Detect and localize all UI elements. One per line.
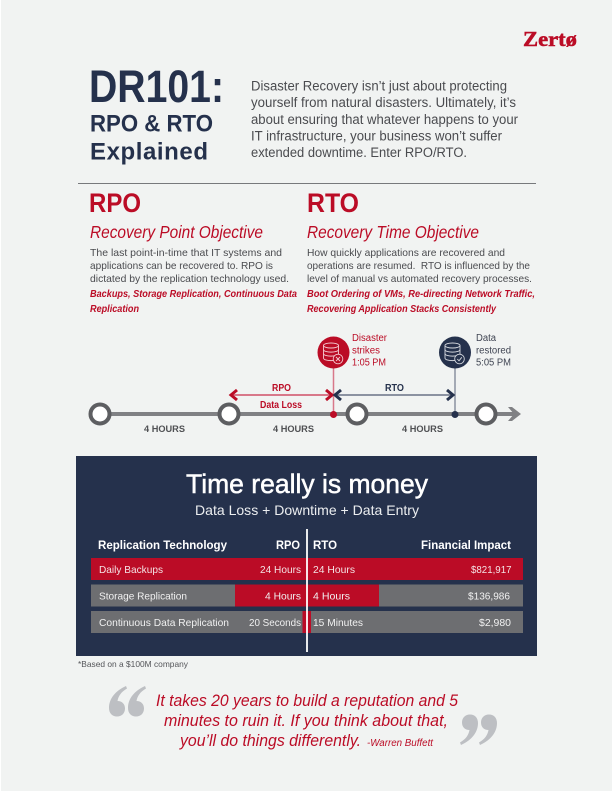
disaster stem xyxy=(330,365,337,418)
RTO examples: Boot Ordering of VMs, Re-directing Network Traffic, xyxy=(307,288,535,300)
RPO examples: Replication xyxy=(90,303,139,315)
logo: Zerto: Zertø xyxy=(523,27,577,51)
RTO description xyxy=(307,247,532,285)
RTO description: operations are resumed. RTO is influenced by the xyxy=(307,260,530,272)
intro paragraph: Disaster Recovery isn’t just about protecting xyxy=(251,78,507,94)
icon: database failure xyxy=(318,336,350,368)
RTO heading: RTO xyxy=(307,188,359,218)
RPO arrow: Data Loss xyxy=(260,400,302,411)
RTO examples xyxy=(307,288,535,315)
RTO examples: Recovering Application Stacks Consistently xyxy=(307,303,497,315)
restored label: restored xyxy=(476,346,511,356)
RTO arrow xyxy=(335,383,453,400)
panel subheading: Data Loss + Downtime + Data Entry xyxy=(195,502,419,518)
restored label xyxy=(476,333,511,368)
table header: Replication Technology xyxy=(98,538,227,552)
RTO subtitle: Recovery Time Objective xyxy=(307,222,479,242)
row: daily backups xyxy=(91,558,523,580)
intro paragraph xyxy=(251,78,518,160)
duration labels: 4 HOURS xyxy=(144,424,185,435)
restored stem xyxy=(452,365,458,418)
RPO description: The last point-in-time that IT systems and xyxy=(90,247,282,259)
quote text: -Warren Buffett xyxy=(367,738,434,749)
table header xyxy=(98,538,511,552)
quote xyxy=(109,686,497,750)
RPO description: dictated by the replication technology used. xyxy=(90,273,289,285)
row: continuous data replication xyxy=(91,611,523,633)
footnote: *Based on a $100M company xyxy=(78,659,189,669)
table header: RPO xyxy=(276,538,300,552)
quote text: It takes 20 years to build a reputation and 5 xyxy=(156,691,459,710)
disaster label: Disaster xyxy=(352,333,388,344)
duration labels: 4 HOURS xyxy=(402,424,443,435)
intro paragraph: yourself from natural disasters. Ultimately, it’s xyxy=(251,95,516,110)
table header: RTO xyxy=(313,538,337,552)
quote text: minutes to ruin it. If you think about that, xyxy=(164,711,448,730)
RPO description: applications can be recovered to. RPO is xyxy=(90,260,273,272)
row: storage replication: Storage Replication xyxy=(99,590,187,602)
row: storage replication: 4 Hours xyxy=(265,590,301,602)
row: continuous data replication: 20 Seconds xyxy=(249,617,301,629)
icon: closing quotation mark xyxy=(460,714,497,745)
title: Explained xyxy=(90,138,208,166)
panel: RPO definition xyxy=(89,188,297,315)
timeline axis with arrow xyxy=(100,407,521,421)
icon: opening quotation mark xyxy=(109,686,146,716)
duration labels: 4 HOURS xyxy=(273,424,314,435)
duration labels xyxy=(144,424,443,435)
title: RPO & RTO xyxy=(90,110,213,138)
RPO arrow xyxy=(231,383,332,411)
intro paragraph: extended downtime. Enter RPO/RTO. xyxy=(251,145,467,160)
row: daily backups: $821,917 xyxy=(471,564,512,576)
timeline nodes xyxy=(90,404,496,424)
RPO arrow: RPO xyxy=(272,383,291,394)
title: DR101: xyxy=(89,61,224,112)
row: continuous data replication: $2,980 xyxy=(479,617,511,629)
title xyxy=(89,61,224,166)
row: storage replication xyxy=(91,584,523,606)
RPO heading: RPO xyxy=(89,188,141,218)
RPO examples xyxy=(90,288,297,315)
RTO arrow: RTO xyxy=(385,383,404,394)
disaster label: 1:05 PM xyxy=(352,358,386,368)
RPO examples: Backups, Storage Replication, Continuous Data xyxy=(90,288,297,300)
RPO subtitle: Recovery Point Objective xyxy=(90,222,263,242)
intro paragraph: IT infrastructure, your business won’t suffer xyxy=(251,128,502,144)
row: continuous data replication: 15 Minutes xyxy=(313,617,363,629)
timeline chart xyxy=(90,333,521,435)
restored label: 5:05 PM xyxy=(476,358,511,368)
disaster label xyxy=(352,333,388,368)
panel: time really is money xyxy=(76,456,537,656)
row: daily backups: 24 Hours xyxy=(260,564,301,576)
panel heading: Time really is money xyxy=(186,469,428,499)
row: daily backups: Daily Backups xyxy=(99,564,163,576)
row: continuous data replication: Continuous Data Replication xyxy=(99,617,229,629)
RTO description: How quickly applications are recovered and xyxy=(307,247,505,259)
table header: Financial Impact xyxy=(421,538,511,552)
intro paragraph: about ensuring that whatever happens to your xyxy=(251,112,518,127)
RPO description xyxy=(90,247,289,285)
disaster label: strikes xyxy=(352,346,380,356)
panel: RTO definition xyxy=(307,188,535,315)
RTO description: level of manual vs automated recovery processes. xyxy=(307,273,532,285)
quote text xyxy=(156,691,459,750)
restored label: Data xyxy=(476,333,496,344)
icon: database restored xyxy=(439,336,471,368)
row: daily backups: 24 Hours xyxy=(313,564,355,576)
row: storage replication: 4 Hours xyxy=(313,590,350,602)
quote text: you’ll do things differently. xyxy=(179,731,361,750)
row: storage replication: $136,986 xyxy=(468,590,510,602)
